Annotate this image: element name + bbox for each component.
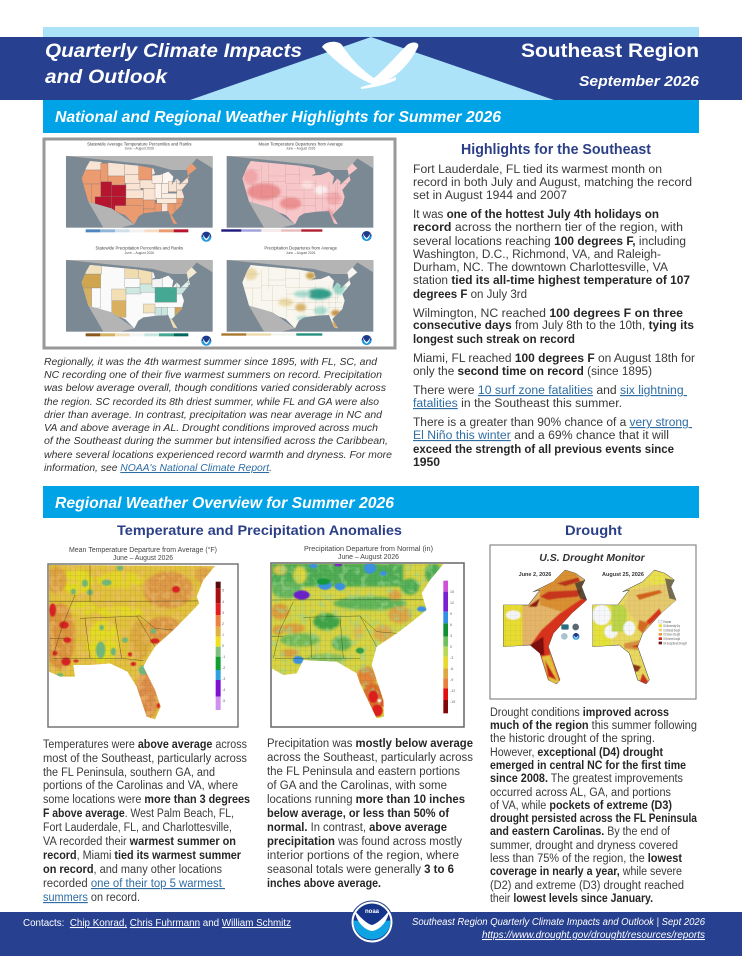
colorbar: -12 xyxy=(450,689,455,693)
footer band xyxy=(0,912,742,956)
text block: drought summary: coverage in nearly a year, while severe xyxy=(490,866,682,878)
chart: temperature departure map: June – August 2026 xyxy=(113,555,173,562)
chart: U.S. Drought Monitor maps: June 2, 2026 xyxy=(519,572,551,578)
text block: regional summary: where several locations experienced record warmth and dryness. For more xyxy=(44,450,392,461)
chart: temperature departure map xyxy=(45,546,238,727)
text block: precipitation summary: seasonal totals were generally 3 to 6 xyxy=(267,864,454,876)
text block: temperature summary: recorded one of their top 5 warmest xyxy=(43,878,225,890)
colorbar: 4 xyxy=(222,600,224,604)
text block: temperature summary: some locations were more than 3 degrees xyxy=(43,794,250,806)
text block: precipitation summary: normal. In contrast, above average xyxy=(267,822,447,834)
text block: highlights list: record in both July and August, matching the record xyxy=(413,177,692,189)
text block: drought summary: However, exceptional (D4) drought xyxy=(490,747,663,759)
text block: drought summary: occurred across AL, GA, and portions xyxy=(490,787,671,799)
colorbar: 3 xyxy=(450,634,452,638)
chart: temperature departure map: Mean Temperature Departure from Average (°F) xyxy=(69,546,217,554)
legend: D0 Abnormally Dry xyxy=(663,624,680,628)
text block: precipitation summary: of GA and the Carolinas, with some xyxy=(267,780,447,792)
icon: NOAA logo xyxy=(351,901,393,943)
text block: highlights list: exceed the strength of all previous events since xyxy=(413,444,674,456)
text block: highlights list: set in August 1944 and 2007 xyxy=(413,190,567,202)
text block: highlights list: There is a greater than 90% chance of a very strong xyxy=(413,417,692,429)
text block: drought summary: summer, drought and dryness covered xyxy=(490,840,678,852)
text block: precipitation summary xyxy=(267,738,473,890)
colorbar: 0 xyxy=(222,644,224,648)
text block: precipitation summary: Precipitation was mostly below average xyxy=(267,738,473,750)
text block: drought summary: Drought conditions improved across xyxy=(490,707,669,719)
legend: D3 Extreme Drought xyxy=(663,637,680,641)
legend: D4 Exceptional Drought xyxy=(663,641,687,645)
text block: highlights list: longest such streak on record xyxy=(413,334,575,346)
text block: drought summary: their lowest levels since January. xyxy=(490,893,653,905)
text block: regional summary: of the Southeast during the summer but intensified across the Caribbean, xyxy=(44,436,388,447)
text block: precipitation summary: across the Southeast, particularly across xyxy=(267,752,473,764)
text block: precipitation summary: below average, or less than 50% of xyxy=(267,808,449,820)
map: August drought xyxy=(591,570,678,685)
text block: temperature summary: Fort Lauderdale, FL, and Charlottesville, xyxy=(43,822,232,834)
text block: regional summary: drier than average. In contrast, precipitation was near average in NC and xyxy=(44,410,383,421)
text block: drought summary xyxy=(490,707,698,905)
header: light blue triangle xyxy=(190,37,554,100)
map: statewide precipitation ranks xyxy=(66,246,213,346)
heading: temperature and precipitation anomalies: Temperature and Precipitation Anomalies xyxy=(117,522,402,538)
chart: precipitation departure map xyxy=(270,546,464,727)
text block: drought summary: and eastern Carolinas. By the end of xyxy=(490,826,671,838)
text block: drought summary: the historic drought of the spring. xyxy=(490,733,655,745)
chart: precipitation departure map: June – August 2026 xyxy=(338,554,399,561)
text block: regional summary: NC recording one of their five warmest summers on record. Precipitation xyxy=(44,370,382,381)
text block: highlights list: It was one of the hottest July 4th holidays on xyxy=(413,209,659,221)
text block: highlights list: Durham, NC. The downtown Charlottesville, VA xyxy=(413,262,668,274)
text block: drought summary: since 2008. The greatest improvements xyxy=(490,773,683,785)
text block: temperature summary: portions of the Carolinas and VA, where xyxy=(43,780,238,792)
heading: drought: Drought xyxy=(565,522,622,538)
text block: temperature summary xyxy=(43,739,250,904)
text block: regional summary: Regionally, it was the 4th warmest summer since 1895, with FL, SC, and xyxy=(44,357,378,368)
text block: regional summary: was below average overall, though conditions varied considerably across xyxy=(44,383,386,394)
map: statewide precipitation ranks: Statewide Precipitation Percentiles and Ranks xyxy=(95,246,183,251)
text block: highlights list: several locations reaching 100 degrees F, including xyxy=(413,236,686,248)
map: precipitation departures xyxy=(221,246,373,345)
text block: temperature summary: VA recorded their warmest summer on xyxy=(43,836,236,848)
map: mean temperature departures: June – August 2026 xyxy=(286,147,316,151)
text block: highlights list: Washington, D.C., Richmond, VA, and Raleigh- xyxy=(413,249,661,261)
section band: regional weather overview: Regional Weather Overview for Summer 2026 xyxy=(55,495,394,512)
text block: drought summary: (D2) and extreme (D3) drought reached xyxy=(490,880,684,892)
footer report title and link: Southeast Region Quarterly Climate Impacts and Outlook | Sept 2026 xyxy=(412,916,705,928)
heading: highlights for the southeast: Highlights for the Southeast xyxy=(461,142,651,158)
text block: highlights list: Miami, FL reached 100 degrees F on August 18th for xyxy=(413,353,695,365)
footer report title and link xyxy=(412,916,706,941)
colorbar: -1 xyxy=(222,655,225,659)
map: mean temperature departures xyxy=(221,141,373,241)
colorbar xyxy=(216,582,225,710)
colorbar xyxy=(443,581,455,713)
title: Quarterly Climate Impacts xyxy=(45,41,302,62)
colorbar: 3 xyxy=(222,611,224,615)
text block: drought summary: drought persisted across the FL Peninsula xyxy=(490,813,698,825)
region and date xyxy=(521,41,700,90)
text block: highlights list: El Niño this winter and a 69% chance that it will xyxy=(413,430,669,442)
text block: regional summary: information, see NOAA's National Climate Report. xyxy=(44,463,272,474)
text block: highlights list: Wilmington, NC reached 100 degrees F on three xyxy=(413,308,683,320)
chart: U.S. Drought Monitor maps: August 25, 2026 xyxy=(602,572,644,578)
map: statewide precipitation ranks: June – August 2026 xyxy=(125,251,154,255)
colorbar: -9 xyxy=(450,678,453,682)
text block: temperature summary: Temperatures were above average across xyxy=(43,739,247,751)
text block: highlights list: fatalities in the Southeast this summer. xyxy=(413,398,622,410)
text block: highlights list: only the second time on record (since 1895) xyxy=(413,366,652,378)
text block: regional summary: the region. SC recorded its 8th driest summer, while FL and GA were also xyxy=(44,397,379,408)
text block: drought summary: emerged in central NC for the first time xyxy=(490,760,686,772)
title xyxy=(45,41,302,88)
legend: D2 Severe Drought xyxy=(663,633,680,637)
colorbar: 15 xyxy=(450,590,454,594)
panel: national maps xyxy=(44,139,395,348)
title: and Outlook xyxy=(45,67,169,88)
text block: precipitation summary: locations running more than 10 inches xyxy=(267,794,465,806)
text block: temperature summary: record, Miami tied its warmest summer xyxy=(43,850,241,862)
colorbar: 2 xyxy=(222,622,224,626)
legend xyxy=(86,229,188,232)
text block: regional summary xyxy=(44,357,392,474)
text block: highlights list: There were 10 surf zone fatalities and six lightning xyxy=(413,385,687,397)
map: mean temperature departures: Mean Temperature Departures from Average xyxy=(258,141,343,146)
colorbar: -6 xyxy=(450,667,453,671)
footer report title and link: https://www.drought.gov/drought/resources/reports xyxy=(482,929,706,941)
text block: regional summary: VA and above average in AL. Drought conditions improved across much xyxy=(44,423,378,434)
chart: U.S. Drought Monitor maps xyxy=(490,545,696,699)
map: precipitation departures: Precipitation Departures from Average xyxy=(264,246,338,251)
text block: precipitation summary: inches above average. xyxy=(267,878,381,890)
legend: None xyxy=(663,620,671,624)
text block: highlights list: Fort Lauderdale, FL tied its warmest month on xyxy=(413,164,662,176)
text block: drought summary: of VA, while pockets of extreme (D3) xyxy=(490,800,672,812)
text block: drought summary: much of the region this summer following xyxy=(490,720,697,732)
legend xyxy=(659,620,687,645)
legend: D1 Moderate Drought xyxy=(663,628,680,632)
region and date: Southeast Region xyxy=(521,41,699,62)
text block: temperature summary: most of the Southeast, particularly across xyxy=(43,753,247,765)
text block: highlights list xyxy=(413,164,695,469)
colorbar: 9 xyxy=(450,612,452,616)
colorbar: -15 xyxy=(450,700,455,704)
icon: white bird logo xyxy=(322,42,418,89)
text block: temperature summary: summers on record. xyxy=(43,892,140,904)
agency logos xyxy=(561,624,579,640)
text block: temperature summary: the FL Peninsula, southern GA, and xyxy=(43,767,215,779)
text block: highlights list: degrees F on July 3rd xyxy=(413,289,527,301)
map: precipitation departures: June – August 2026 xyxy=(286,251,316,255)
text block: highlights list: station tied its all-time highest temperature of 107 xyxy=(413,275,690,287)
section band: national and regional highlights xyxy=(43,100,699,133)
section band: regional weather overview xyxy=(43,486,699,518)
colorbar: -2 xyxy=(222,666,225,670)
section band: national and regional highlights: National and Regional Weather Highlights for Summer 2026 xyxy=(55,109,501,126)
text block: temperature summary: on record, and many other locations xyxy=(43,864,222,876)
icon: NOAA logo: noaa xyxy=(365,909,380,915)
region and date: September 2026 xyxy=(579,73,700,90)
map: statewide temperature ranks xyxy=(66,141,213,242)
text block: highlights list: 1950 xyxy=(413,457,440,469)
map: statewide temperature ranks: Statewide Average Temperature Percentiles and Ranks xyxy=(87,141,191,146)
chart: precipitation departure map: Precipitation Departure from Normal (in) xyxy=(304,546,433,553)
map: statewide temperature ranks: June – August 2026 xyxy=(125,147,154,151)
text block: highlights list: consecutive days from July 8th to the 10th, tying its xyxy=(413,320,694,332)
footer contacts: Contacts: Chip Konrad, Chris Fuhrmann and William Schmitz xyxy=(23,917,291,929)
header: top light blue strip xyxy=(43,27,699,37)
colorbar: -5 xyxy=(222,699,225,703)
header: navy banner xyxy=(0,37,742,100)
text block: highlights list: record across the northern tier of the region, with xyxy=(413,222,683,234)
colorbar: -3 xyxy=(222,677,225,681)
colorbar: 12 xyxy=(450,601,454,605)
text block: precipitation summary: interior portions of the region, where xyxy=(267,850,459,862)
chart: U.S. Drought Monitor maps: U.S. Drought Monitor xyxy=(539,552,646,564)
text block: drought summary: less than 75% of the region, the lowest xyxy=(490,853,682,865)
colorbar: -4 xyxy=(222,688,225,692)
text block: temperature summary: F above average. West Palm Beach, FL, xyxy=(43,808,234,820)
text block: precipitation summary: precipitation was found across mostly xyxy=(267,836,462,848)
colorbar: 0 xyxy=(450,645,452,649)
colorbar: -3 xyxy=(450,656,453,660)
colorbar: 6 xyxy=(450,623,452,627)
text block: precipitation summary: the FL Peninsula and eastern portions xyxy=(267,766,460,778)
colorbar: 5 xyxy=(222,589,224,593)
colorbar: 1 xyxy=(222,633,224,637)
map: June drought xyxy=(502,570,588,685)
